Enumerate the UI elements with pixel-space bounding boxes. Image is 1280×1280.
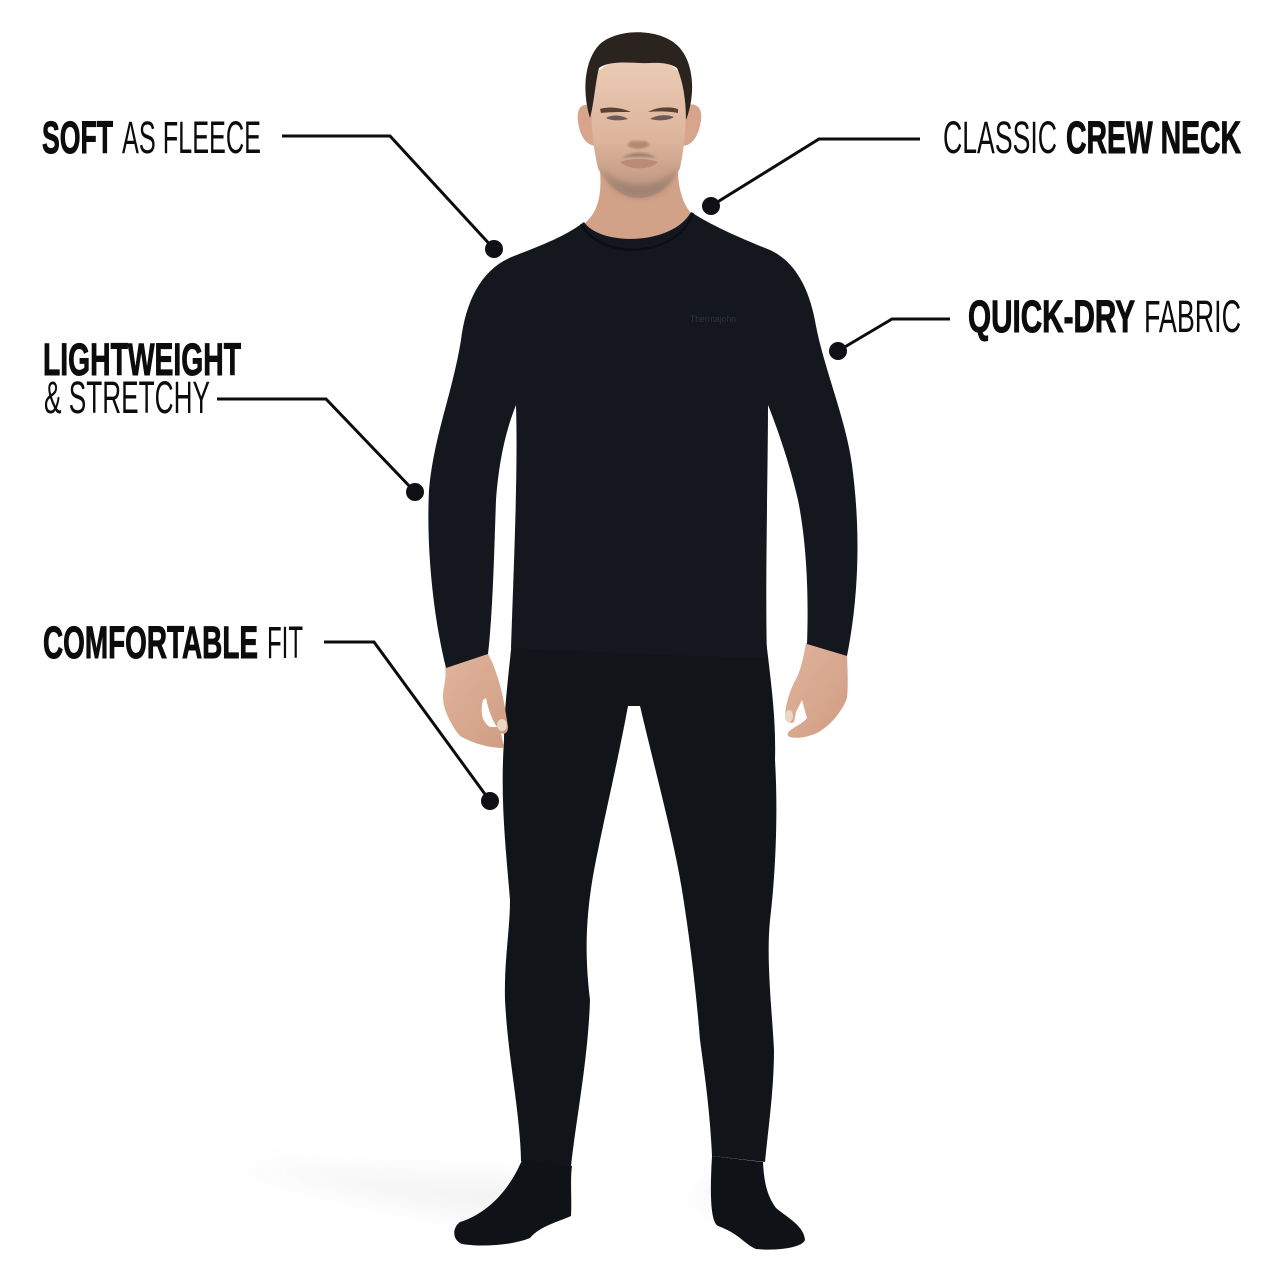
shirt body and sleeves xyxy=(428,212,857,668)
long-sleeve shirt xyxy=(428,212,857,668)
right sock xyxy=(711,1156,805,1250)
right hand xyxy=(785,643,848,738)
mustache shadow xyxy=(622,153,657,158)
callout: lightweight and stretchy xyxy=(43,334,424,501)
label xyxy=(943,112,1241,163)
label xyxy=(42,112,261,163)
left hand xyxy=(443,654,508,748)
leader line xyxy=(282,136,503,258)
mouth xyxy=(620,159,658,168)
callout: quick-dry fabric xyxy=(829,291,1241,360)
collar xyxy=(581,213,693,250)
label xyxy=(43,334,241,423)
label: AS FLEECE xyxy=(122,112,261,163)
label: & STRETCHY xyxy=(44,372,210,423)
leader line xyxy=(702,139,920,215)
neck xyxy=(584,170,692,241)
leggings xyxy=(503,640,776,1166)
callout: comfortable fit xyxy=(43,617,499,810)
label: COMFORTABLE xyxy=(43,617,258,668)
stubble shading xyxy=(600,165,678,198)
callout: soft as fleece xyxy=(42,112,503,258)
gap between thumb and finger xyxy=(482,698,497,727)
face xyxy=(591,58,686,198)
eyebrows xyxy=(600,107,678,113)
left sock xyxy=(454,1160,572,1246)
leader line xyxy=(829,319,950,360)
leader line xyxy=(217,399,424,501)
label: LIGHTWEIGHT xyxy=(43,334,241,385)
label: SOFT xyxy=(42,112,113,163)
ears xyxy=(578,105,701,146)
eyes xyxy=(606,115,674,120)
head xyxy=(578,32,701,198)
callout: classic crew neck xyxy=(702,112,1241,215)
fingernail xyxy=(497,719,507,731)
leader line xyxy=(324,642,499,810)
floor shadow xyxy=(225,1165,770,1218)
label: QUICK-DRY xyxy=(968,291,1135,342)
fingernail xyxy=(785,710,793,722)
label: CLASSIC xyxy=(943,112,1057,163)
man wearing black base layer xyxy=(428,32,857,1250)
nose xyxy=(627,141,650,149)
hair xyxy=(585,32,692,120)
label: FIT xyxy=(267,617,303,668)
logo: Thermajohn xyxy=(690,314,736,324)
